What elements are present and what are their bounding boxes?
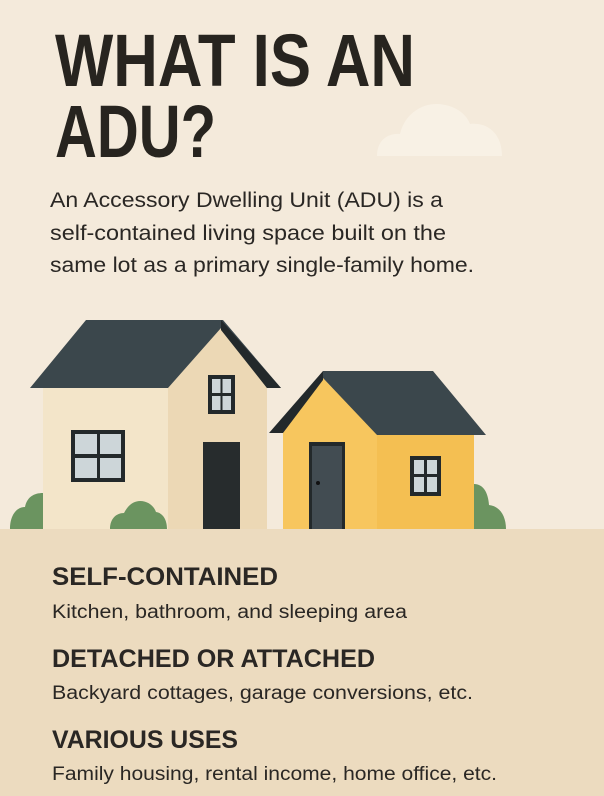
main house bbox=[30, 320, 281, 529]
feature: self-contained bbox=[52, 563, 407, 623]
feature list bbox=[52, 563, 497, 785]
icon: ADU window bbox=[410, 456, 441, 496]
title: WHAT IS AN bbox=[55, 19, 415, 102]
title: ADU? bbox=[55, 90, 216, 173]
icon: big window bbox=[71, 430, 125, 482]
feature: self-contained: SELF-CONTAINED bbox=[52, 563, 278, 591]
icon: ADU door bbox=[309, 442, 345, 529]
icon: bush right bbox=[474, 484, 506, 529]
icon: cloud bbox=[377, 104, 502, 156]
icon: upper window bbox=[208, 375, 235, 414]
ground band bbox=[0, 529, 604, 796]
feature: detached or attached bbox=[52, 645, 473, 704]
intro paragraph: same lot as a primary single-family home. bbox=[50, 254, 474, 277]
title bbox=[55, 19, 415, 173]
feature: various uses: Family housing, rental income, home office, etc. bbox=[52, 764, 497, 785]
icon: main door bbox=[203, 442, 240, 529]
intro paragraph: self-contained living space built on the bbox=[50, 222, 446, 245]
feature: various uses bbox=[52, 726, 497, 785]
icon: bush middle bbox=[110, 501, 167, 529]
intro paragraph bbox=[50, 189, 474, 277]
feature: detached or attached: DETACHED OR ATTACHED bbox=[52, 645, 375, 673]
feature: self-contained: Kitchen, bathroom, and sleeping area bbox=[52, 602, 407, 623]
feature: detached or attached: Backyard cottages, garage conversions, etc. bbox=[52, 683, 473, 704]
feature: various uses: VARIOUS USES bbox=[52, 726, 238, 754]
icon: bush left bbox=[10, 493, 43, 529]
illustration: houses bbox=[10, 320, 506, 529]
intro paragraph: An Accessory Dwelling Unit (ADU) is a bbox=[50, 189, 443, 212]
ADU house bbox=[269, 371, 486, 529]
